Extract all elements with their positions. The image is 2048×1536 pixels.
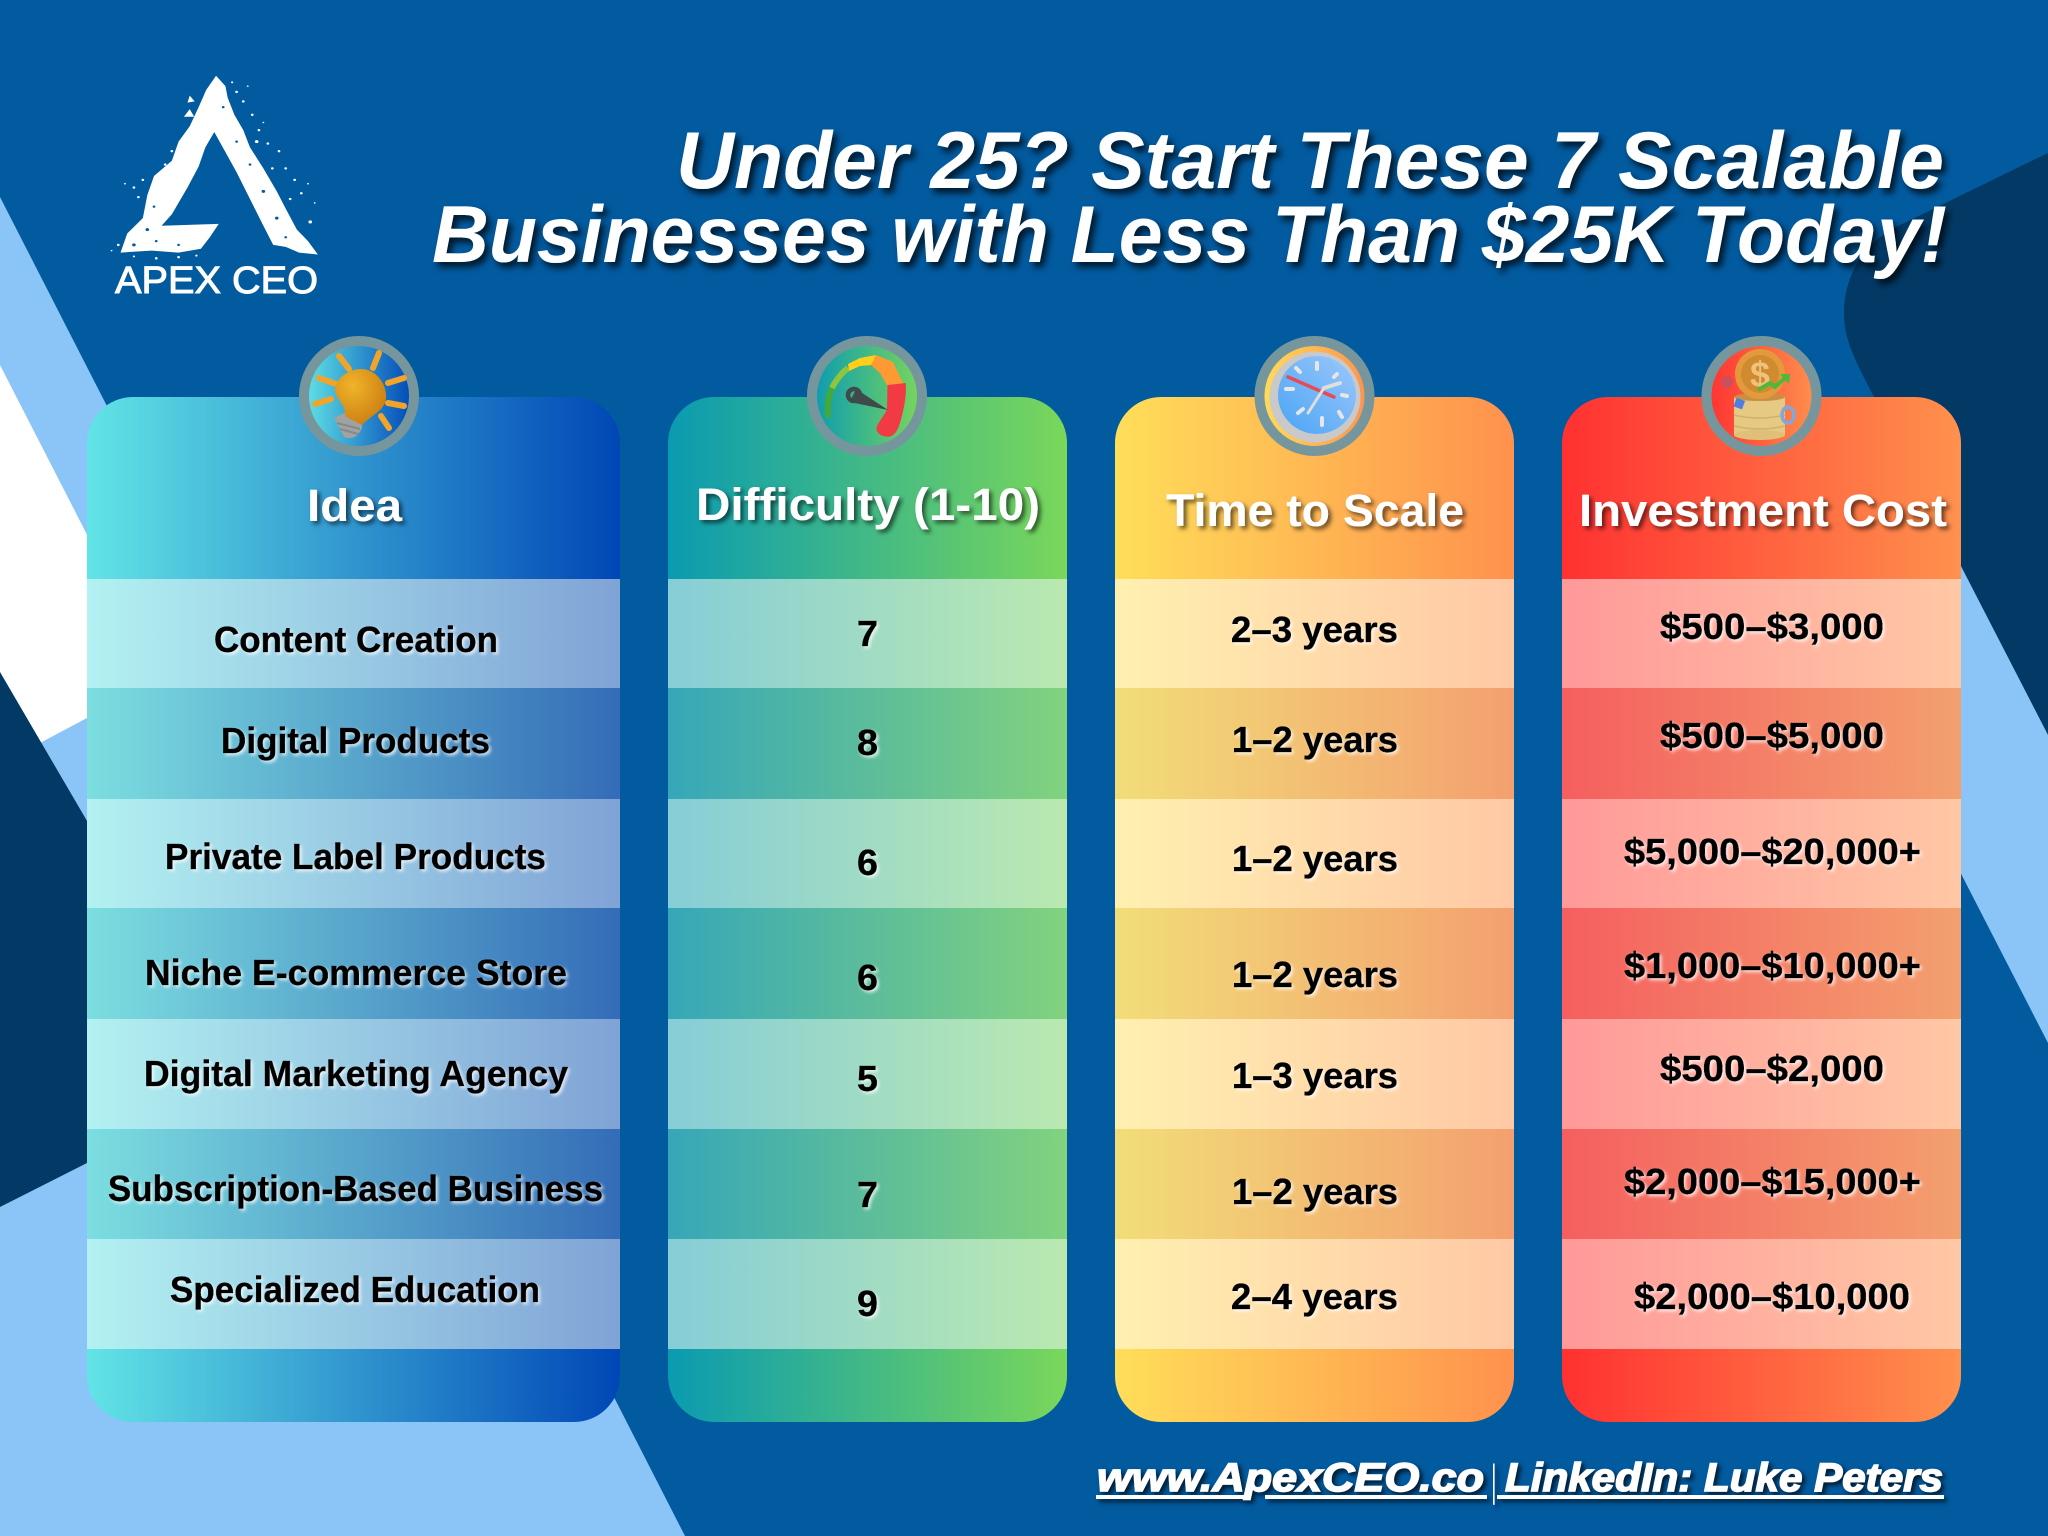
row: 2–3 years: 2–3 years [1231, 609, 1398, 650]
row: Private Label Products: Private Label Products [165, 836, 546, 877]
heading: Idea: Idea [307, 480, 403, 531]
row: $500–$2,000: $500–$2,000 [1660, 1048, 1884, 1089]
row: $1,000–$10,000+: $1,000–$10,000+ [1624, 945, 1921, 986]
footer links: | [1491, 1456, 1496, 1505]
row: difficulty 6: 6 [857, 842, 878, 883]
row: 1–3 years: 1–3 years [1232, 1055, 1398, 1096]
row: 2–4 years: 2–4 years [1231, 1276, 1398, 1317]
panel: Time to Scale column [1115, 341, 1514, 1422]
panel: Difficulty column [668, 341, 1067, 1422]
icon: gauge [812, 341, 922, 451]
row: Digital Marketing Agency: Digital Marketing Agency [144, 1053, 568, 1094]
row: $500–$5,000: $500–$5,000 [1660, 715, 1884, 756]
row: difficulty 9: 9 [857, 1283, 878, 1324]
icon: coin stack: $ [1750, 354, 1770, 395]
footer links [1096, 1456, 1944, 1505]
logo mark [111, 76, 318, 259]
icon: coin stack [1706, 341, 1816, 451]
heading: Investment Cost: Investment Cost [1579, 485, 1947, 536]
row: Niche E-commerce Store: Niche E-commerce Store [145, 952, 567, 993]
logo: Apex CEO [111, 76, 318, 302]
row: difficulty 6: 6 [857, 957, 878, 998]
row: Digital Products: Digital Products [221, 720, 490, 761]
footer links: www.ApexCEO.co [1097, 1456, 1484, 1500]
footer links: LinkedIn: Luke Peters [1505, 1456, 1943, 1500]
row: 1–2 years: 1–2 years [1232, 719, 1398, 760]
logo wordmark: APEX CEO [115, 260, 318, 302]
title: Businesses with Less Than $25K Today! [432, 190, 1947, 280]
row: $5,000–$20,000+: $5,000–$20,000+ [1624, 831, 1921, 872]
icon: clock [1260, 341, 1370, 451]
panel: Idea column [87, 341, 620, 1422]
panel: Investment Cost column [1562, 341, 1961, 1422]
icon: light bulb [304, 341, 414, 451]
row: Specialized Education: Specialized Education [170, 1269, 540, 1310]
title: Under 25? Start These 7 Scalable [676, 116, 1944, 206]
row: difficulty 8: 8 [857, 722, 878, 763]
row: 1–2 years: 1–2 years [1232, 1171, 1398, 1212]
heading: Difficulty (1-10): Difficulty (1-10) [696, 479, 1040, 530]
row: $2,000–$10,000: $2,000–$10,000 [1634, 1276, 1910, 1317]
row: $500–$3,000: $500–$3,000 [1660, 606, 1884, 647]
row: 1–2 years: 1–2 years [1232, 954, 1398, 995]
row: 1–2 years: 1–2 years [1232, 838, 1398, 879]
title [432, 116, 1947, 280]
row: difficulty 7: 7 [857, 1174, 878, 1215]
row: Subscription-Based Business: Subscription-Based Business [108, 1168, 603, 1209]
row: difficulty 5: 5 [857, 1058, 878, 1099]
row: $2,000–$15,000+: $2,000–$15,000+ [1624, 1161, 1921, 1202]
row: difficulty 7: 7 [857, 613, 878, 654]
row: Content Creation: Content Creation [214, 619, 498, 660]
heading: Time to Scale: Time to Scale [1166, 485, 1464, 536]
